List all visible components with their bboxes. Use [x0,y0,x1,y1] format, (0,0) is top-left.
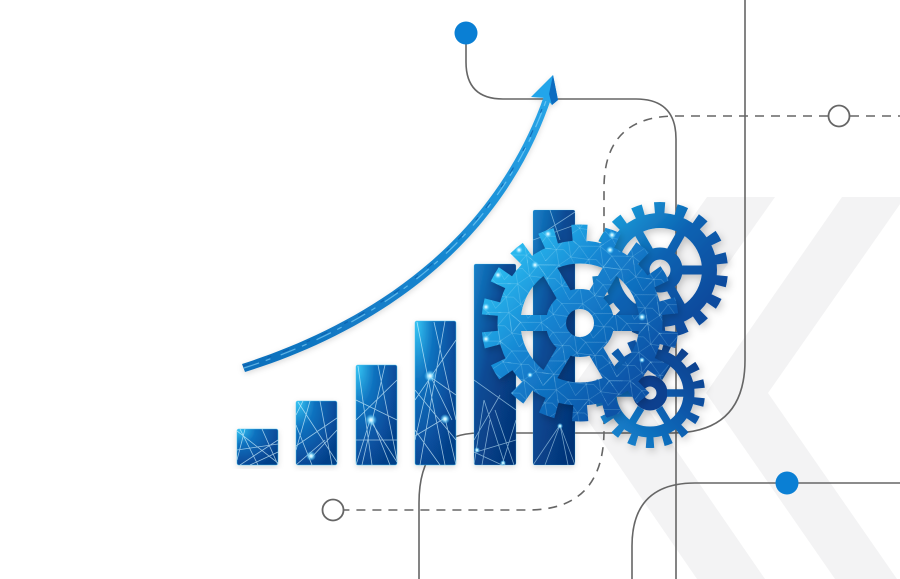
line: right loop to lower left [419,0,745,579]
gear mesh texture [491,234,669,412]
bar 2 [296,401,337,465]
icon: large central gear [491,234,669,412]
icon: bottom right gear [602,345,698,441]
ring [611,354,689,432]
line: lower right node path [632,483,900,579]
bar 1 [237,429,278,465]
icon: top right gear [600,210,720,330]
ring [509,252,651,394]
spokes [615,230,705,310]
infographic canvas [234,0,900,579]
bar chart [237,210,575,466]
node: blue lower right [776,472,798,494]
bar 5 [474,264,516,466]
arrow head [531,75,558,105]
circuit lines [344,0,900,579]
background: pale K logo [569,197,900,579]
arrow shaft mesh [244,98,547,368]
hub [638,381,662,405]
bar 4 [415,321,456,465]
node: blue top [454,22,478,44]
teeth [491,234,669,412]
growth arrow [242,75,558,372]
spokes [612,360,688,426]
teeth [602,345,698,441]
bar 6 [533,210,575,465]
hub [644,254,676,286]
node: hollow top right [828,106,850,126]
gear highlights [482,230,646,378]
arrow shaft [242,96,551,372]
line: top-left node path [466,33,676,579]
line: dashed top right [344,116,828,510]
spokes [510,261,650,385]
hub [556,299,604,347]
node: hollow bottom left [322,500,344,520]
teeth [600,210,720,330]
bar 3 [356,365,397,465]
ring [610,220,710,320]
